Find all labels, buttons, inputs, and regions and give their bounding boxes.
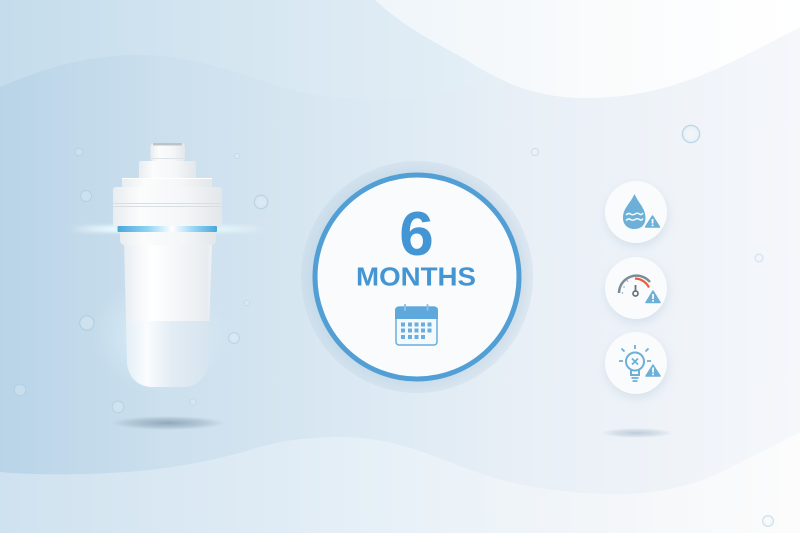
second step [139, 161, 196, 178]
blue band [118, 226, 217, 232]
lower water level [126, 321, 210, 387]
halo [301, 161, 533, 393]
collar [120, 231, 216, 245]
floor shadow [111, 416, 225, 430]
icon: light bulb warning [605, 332, 667, 394]
icon: water quality warning [605, 181, 667, 243]
third step [122, 178, 212, 188]
top cap [150, 143, 185, 162]
number 6: 6 [399, 200, 434, 269]
top right light wave [375, 0, 800, 98]
cartridge body [124, 244, 212, 387]
glow [92, 277, 228, 393]
light flare [70, 226, 265, 232]
icon: calendar [395, 304, 438, 345]
MONTHS label: MONTHS [356, 262, 476, 292]
main lid [113, 187, 222, 227]
top wave backdrop [0, 0, 520, 99]
central circle [301, 161, 533, 393]
icon: pressure gauge warning [605, 257, 667, 319]
bottom wave [0, 432, 800, 533]
ring [315, 175, 519, 379]
icon column shadow [601, 428, 673, 438]
water droplets [14, 124, 774, 527]
filter cartridge [70, 143, 265, 430]
